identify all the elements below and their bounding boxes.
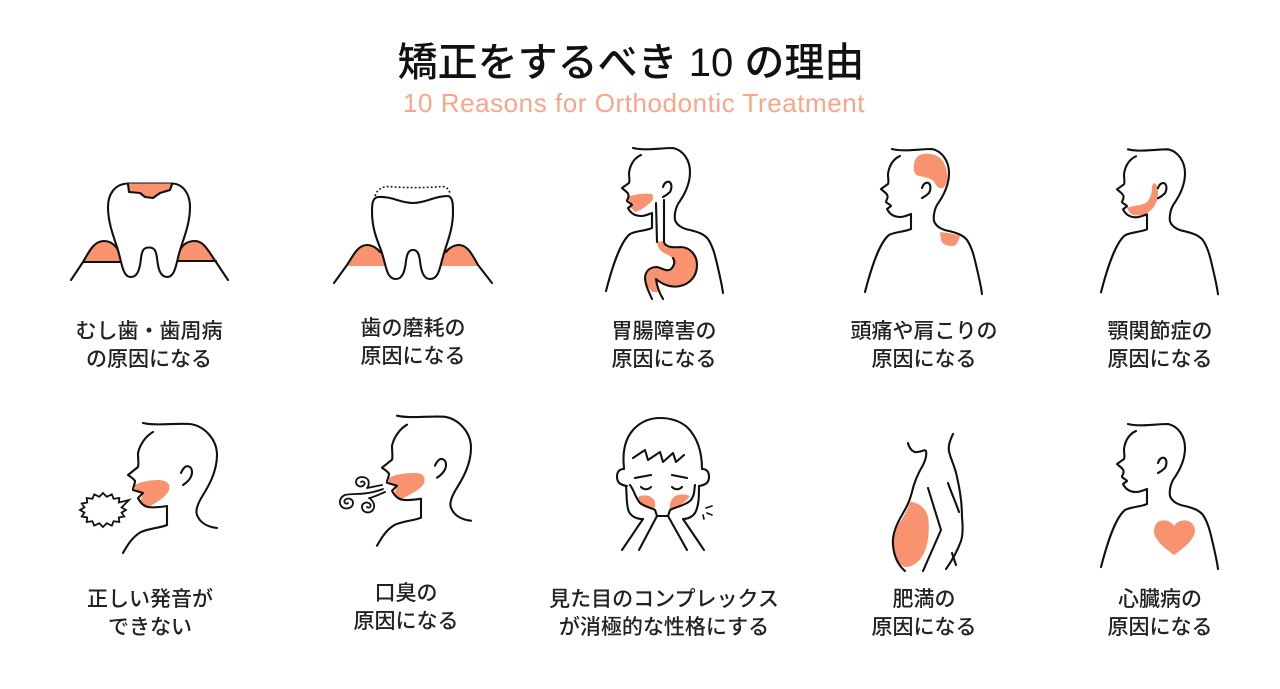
title: 矯正をするべき 10 の理由 [398, 41, 864, 85]
label: gastrointestinal disorders: 原因になる [612, 348, 716, 371]
label: obesity: 肥満の [892, 588, 956, 611]
subtitle: 10 Reasons for Orthodontic Treatment [403, 88, 865, 118]
icon: face resting on hands [617, 418, 712, 550]
panel: TMJ disorder [1101, 149, 1218, 371]
icon: person with head and shoulder highlight [865, 149, 982, 294]
icon: worn tooth [334, 186, 492, 283]
panel: tooth wear [334, 186, 492, 368]
icon: tooth with cavity [71, 184, 228, 280]
icon: person with heart [1101, 424, 1218, 569]
panel: speech [80, 423, 217, 639]
label: TMJ disorder: 原因になる [1108, 348, 1212, 371]
panel: obesity [872, 434, 976, 639]
icon: person speaking with speech burst [80, 423, 217, 553]
label: headache and stiff shoulders: 頭痛や肩こりの [850, 320, 998, 343]
panel: gastrointestinal disorders [606, 148, 723, 371]
label: appearance complex: が消極的な性格にする [559, 616, 769, 639]
label: cavities and gum disease: の原因になる [86, 348, 212, 371]
panel: headache and stiff shoulders [850, 149, 998, 371]
icon: breath swirls [340, 477, 385, 512]
icon: speech burst [80, 493, 129, 527]
panel: heart disease [1101, 424, 1218, 639]
label: gastrointestinal disorders: 胃腸障害の [612, 320, 716, 343]
icon: heart [1154, 520, 1195, 555]
panel: appearance complex [549, 418, 779, 639]
label: speech: できない [108, 616, 192, 639]
label: TMJ disorder: 顎関節症の [1108, 320, 1212, 343]
label: tooth wear: 歯の磨耗の [360, 317, 466, 340]
label: speech: 正しい発音が [87, 588, 213, 611]
label: appearance complex: 見た目のコンプレックス [549, 588, 779, 611]
label: obesity: 原因になる [872, 616, 976, 639]
panel: cavities and gum disease [71, 184, 228, 371]
label: heart disease: 原因になる [1108, 616, 1212, 639]
icon: person with stomach [606, 148, 723, 299]
label: heart disease: 心臓病の [1118, 588, 1202, 611]
icon: person with breath swirls [340, 416, 471, 546]
icon: side body with belly highlight [893, 434, 963, 571]
panel: bad breath [340, 416, 471, 633]
label: bad breath: 原因になる [354, 610, 458, 633]
label: bad breath: 口臭の [374, 582, 438, 605]
label: tooth wear: 原因になる [360, 345, 466, 368]
label: headache and stiff shoulders: 原因になる [872, 348, 976, 371]
label: cavities and gum disease: むし歯・歯周病 [76, 320, 222, 343]
icon: person with jaw highlight [1101, 149, 1218, 294]
